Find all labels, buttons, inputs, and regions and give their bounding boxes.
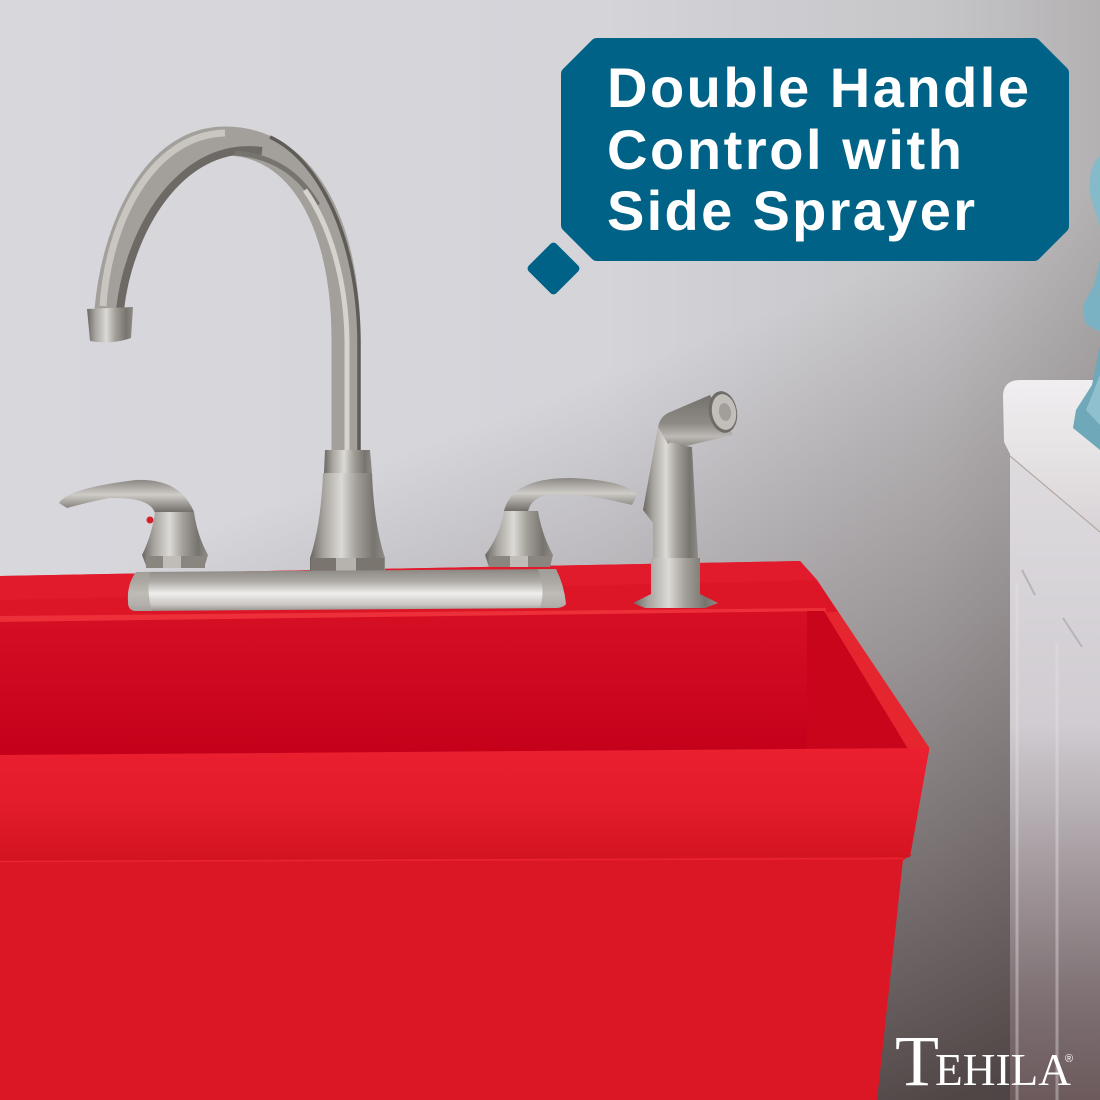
towel <box>1073 156 1100 450</box>
callout heading: Double Handle <box>607 56 1029 119</box>
sink rim <box>0 561 930 760</box>
side sprayer <box>633 389 740 608</box>
sink seam <box>0 858 903 862</box>
faucet gooseneck <box>87 133 359 455</box>
callout diamond <box>526 241 581 296</box>
washing machine <box>1003 380 1100 1100</box>
sink body <box>0 855 912 1100</box>
sink front band <box>0 748 930 861</box>
brand logo: T <box>895 1021 939 1100</box>
faucet base column <box>310 450 385 572</box>
callout heading: Control with <box>607 118 962 181</box>
right handle <box>485 478 637 567</box>
registered mark: ® <box>1065 1053 1073 1065</box>
brand logo: EHILA <box>935 1044 1071 1095</box>
left handle <box>59 480 208 568</box>
callout box <box>561 38 1069 261</box>
sink interior <box>0 611 908 756</box>
callout heading: Side Sprayer <box>607 179 975 242</box>
brand logo <box>895 1021 1071 1100</box>
deck plate <box>128 569 566 611</box>
